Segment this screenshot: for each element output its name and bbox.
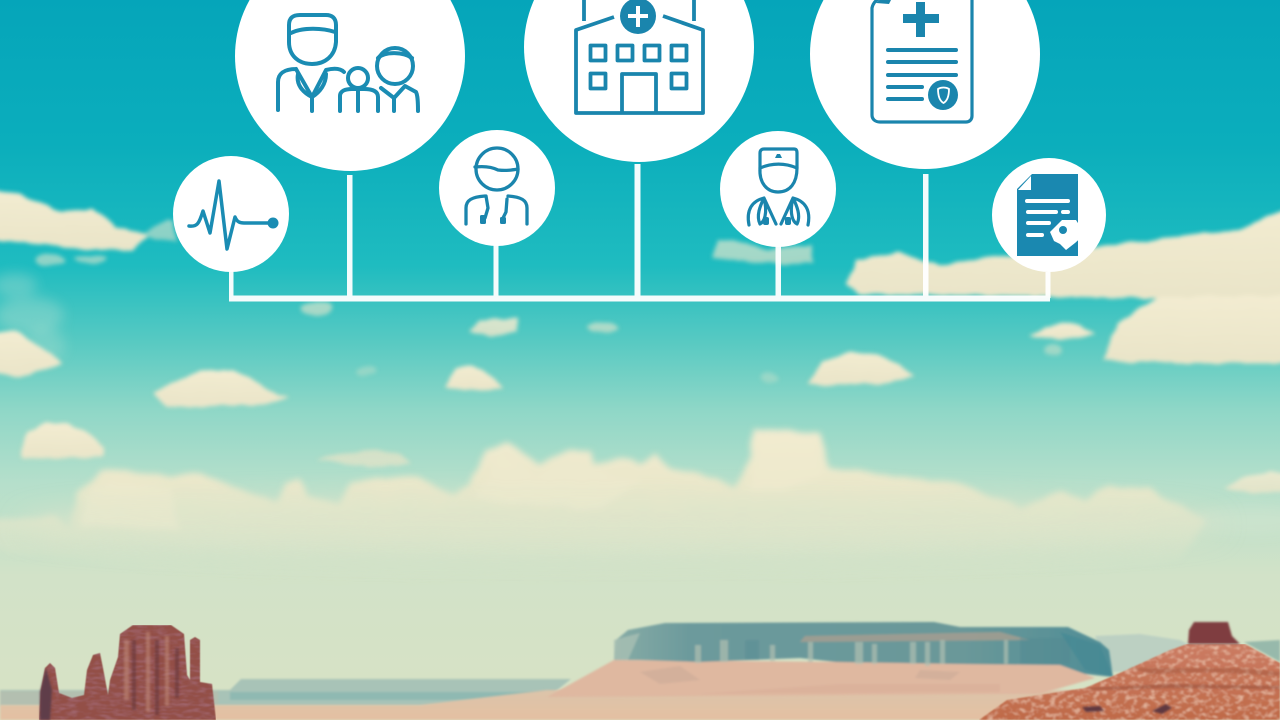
right butte cap and shadows xyxy=(1082,622,1280,714)
icon: surgeon xyxy=(748,149,809,225)
clouds: mid-level cloud bank xyxy=(0,430,1207,585)
mesa talus slope xyxy=(547,660,1095,697)
node: signed document xyxy=(992,158,1106,272)
icon: doctor xyxy=(466,148,527,224)
distant hazy mesas xyxy=(0,634,1280,706)
node: family of patients xyxy=(235,0,465,171)
central mesa xyxy=(547,622,1113,697)
node: heartbeat xyxy=(173,156,289,272)
clouds: faint flat wisp xyxy=(316,450,410,467)
desert ground xyxy=(0,690,1100,720)
clouds: faint haze wisps xyxy=(0,273,1280,534)
node: medical record xyxy=(810,0,1040,169)
left butte xyxy=(39,625,216,720)
icon: family xyxy=(278,15,418,111)
node: doctor with cap xyxy=(439,130,555,246)
node: hospital xyxy=(524,0,754,162)
clouds: soft underside haze xyxy=(20,499,1220,551)
icon: clipboard report xyxy=(872,0,972,122)
right butte xyxy=(979,644,1280,720)
clouds: upper and scattered xyxy=(0,190,1280,493)
node: surgeon xyxy=(720,131,836,247)
left butte shading xyxy=(40,632,179,720)
icon: document with seal xyxy=(1017,174,1078,256)
icon: hospital building xyxy=(576,0,703,113)
icon: medical cross badge xyxy=(620,0,656,34)
icon: ECG pulse xyxy=(189,181,270,249)
mesa cliff face xyxy=(614,622,1113,677)
connector lines xyxy=(229,164,1050,302)
right cloud bank xyxy=(845,205,1280,300)
